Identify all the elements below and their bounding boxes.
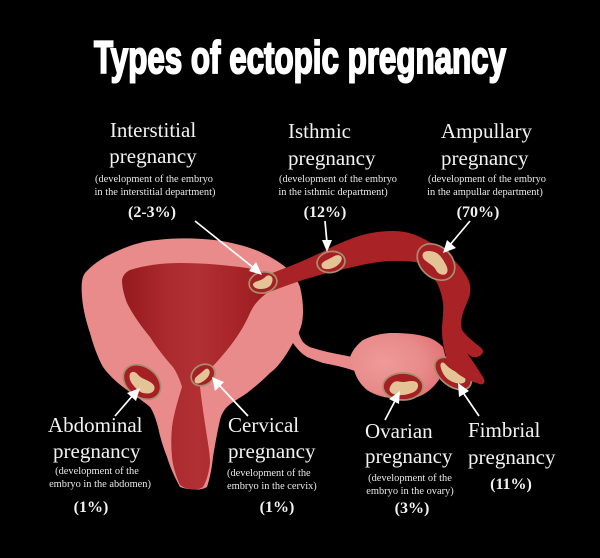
label: interstitial pregnancy: (development of the embryo: [95, 174, 213, 185]
label: isthmic pregnancy: in the isthmic department): [278, 187, 388, 198]
label: abdominal pregnancy: Abdominal: [48, 413, 143, 437]
label: cervical pregnancy: (1%): [260, 499, 294, 516]
uterus outer wall: [82, 238, 303, 490]
arrow: fimbrial: [458, 383, 479, 416]
label: ovarian pregnancy: (3%): [395, 500, 429, 517]
label: interstitial pregnancy: pregnancy: [109, 144, 197, 168]
label: abdominal pregnancy: pregnancy: [53, 439, 141, 463]
label: interstitial pregnancy: in the interstitial department): [95, 187, 215, 198]
isthmic pregnancy site: [315, 249, 347, 275]
label: fimbrial pregnancy: (11%): [490, 476, 532, 493]
label: abdominal pregnancy: [48, 413, 151, 516]
ovarian ligament: [293, 322, 355, 371]
label: cervical pregnancy: embryo in the cervix): [227, 481, 317, 492]
abdominal pregnancy site: [117, 358, 167, 406]
label: ampullary pregnancy: [427, 119, 546, 221]
label: interstitial pregnancy: (2-3%): [128, 204, 176, 221]
label: ovarian pregnancy: [365, 419, 454, 517]
label: isthmic pregnancy: [278, 119, 397, 221]
label: abdominal pregnancy: (development of the: [55, 466, 139, 477]
label: cervical pregnancy: Cervical: [228, 413, 299, 437]
arrow: cervical: [212, 377, 248, 416]
arrow: ampullary: [443, 221, 470, 253]
label: ovarian pregnancy: embryo in the ovary): [366, 486, 454, 497]
label: ovarian pregnancy: Ovarian: [365, 419, 433, 443]
arrow: abdominal: [115, 388, 140, 416]
arrow: isthmic: [322, 221, 332, 252]
cervical pregnancy site: [187, 360, 219, 390]
label: fimbrial pregnancy: Fimbrial: [468, 418, 540, 442]
label: cervical pregnancy: pregnancy: [228, 439, 316, 463]
label: interstitial pregnancy: [95, 118, 215, 221]
arrow: interstitial: [195, 221, 262, 275]
label: ovarian pregnancy: pregnancy: [365, 444, 453, 468]
interstitial pregnancy site: [247, 269, 279, 296]
ovary: [350, 333, 447, 400]
label: ampullary pregnancy: in the ampullar department): [427, 187, 543, 198]
label: abdominal pregnancy: (1%): [74, 499, 108, 516]
label: fimbrial pregnancy: pregnancy: [468, 445, 556, 469]
label: ovarian pregnancy: (development of the: [368, 473, 452, 484]
label: ampullary pregnancy: (70%): [457, 204, 499, 221]
label: isthmic pregnancy: (development of the embryo: [279, 174, 397, 185]
label: ampullary pregnancy: (development of the embryo: [428, 174, 546, 185]
label: isthmic pregnancy: (12%): [304, 204, 346, 221]
label: isthmic pregnancy: pregnancy: [288, 146, 376, 170]
label: cervical pregnancy: (development of the: [227, 468, 311, 479]
fallopian tube with fimbriae: [262, 231, 484, 384]
uterine cavity and cervical canal: [122, 263, 273, 490]
arrow: ovarian: [385, 391, 400, 420]
label: interstitial pregnancy: Interstitial: [110, 118, 196, 142]
label: fimbrial pregnancy: [468, 418, 556, 493]
label: isthmic pregnancy: Isthmic: [288, 119, 351, 143]
fimbrial pregnancy site: [429, 351, 477, 396]
label: ampullary pregnancy: pregnancy: [441, 146, 529, 170]
label: ampullary pregnancy: Ampullary: [441, 119, 532, 143]
label: abdominal pregnancy: embryo in the abdomen): [49, 479, 151, 490]
ovarian pregnancy site: [383, 373, 423, 400]
ampullary pregnancy site: [410, 236, 462, 288]
label: cervical pregnancy: [227, 413, 317, 516]
